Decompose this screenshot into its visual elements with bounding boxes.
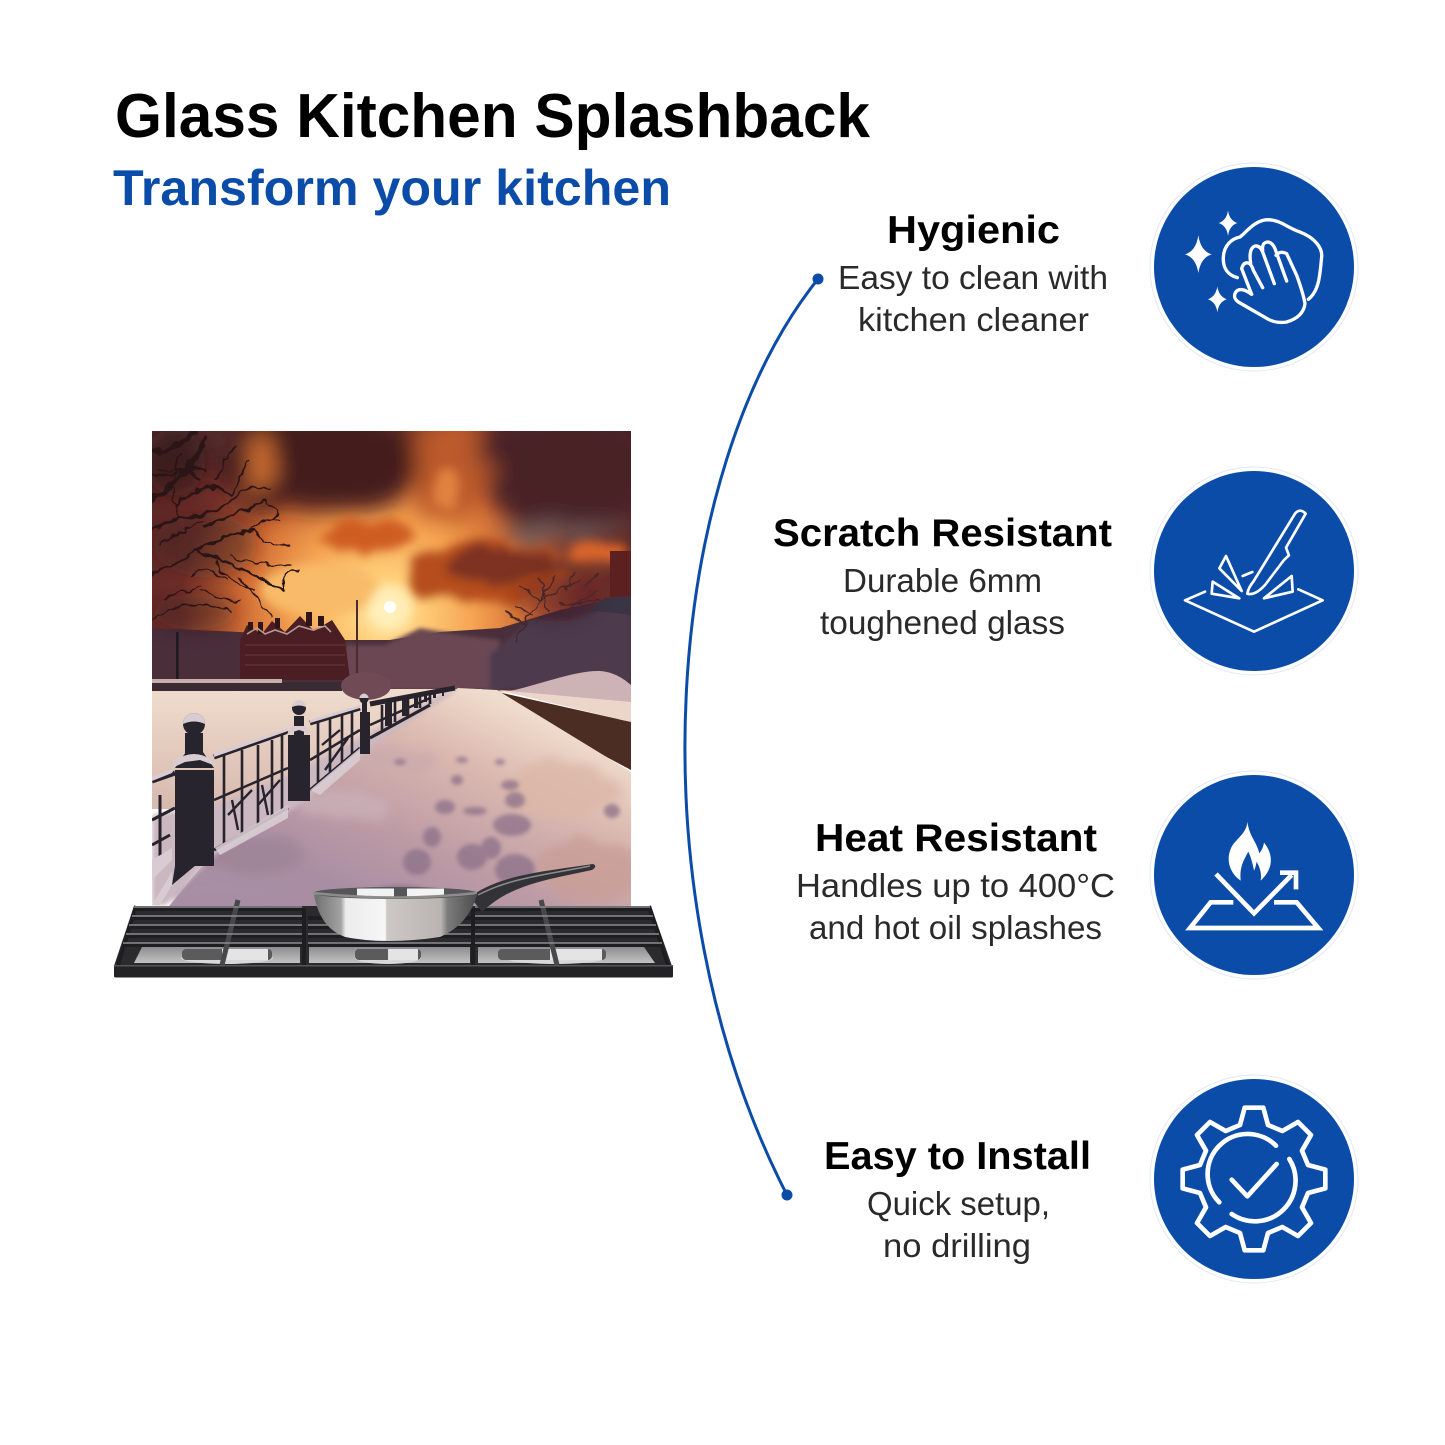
snowy path (165, 688, 631, 911)
fence post 1 (172, 689, 444, 885)
feature: easy to install: Quick setup, (867, 1185, 1050, 1222)
front edge (114, 965, 673, 978)
icon: scratch resistant knife on glass (1150, 467, 1358, 675)
snow shading (160, 748, 645, 905)
tree shade (145, 428, 595, 630)
title: Glass Kitchen Splashback (115, 82, 870, 151)
brick mansion block (240, 612, 350, 680)
gas cooktop (114, 864, 673, 978)
grates (118, 900, 668, 965)
burners (181, 949, 606, 964)
iron fence with posts (152, 688, 455, 905)
grate highlights (123, 907, 662, 943)
connector curve (685, 279, 818, 1195)
feature: scratch resistant: toughened glass (820, 604, 1065, 641)
left tree (150, 431, 300, 620)
icon: heat resistant flame (1150, 771, 1358, 979)
feature: heat resistant: and hot oil splashes (809, 909, 1102, 946)
feature: easy to install: Easy to Install (824, 1135, 1091, 1178)
feature: hygienic: Hygienic (887, 209, 1060, 252)
feature: easy to install: no drilling (883, 1227, 1031, 1264)
feature: scratch resistant: Scratch Resistant (773, 512, 1112, 555)
feature: hygienic: Easy to clean with (838, 259, 1108, 296)
lamp post (176, 632, 179, 679)
skyline and trees (152, 551, 631, 697)
hedge (152, 672, 391, 700)
splashback photo: snowy park at sunset (152, 431, 631, 906)
hob body (114, 906, 672, 966)
right tree (505, 572, 600, 640)
feature: heat resistant: Heat Resistant (815, 817, 1097, 860)
frying pan (313, 864, 595, 941)
steel plates (134, 947, 655, 963)
feature: scratch resistant: Durable 6mm (843, 562, 1042, 599)
snow drift under fence (152, 688, 460, 905)
subtitle: Transform your kitchen (113, 160, 671, 216)
icon: hygienic hand wiping (1150, 163, 1358, 371)
feature: heat resistant: Handles up to 400°C (796, 867, 1115, 904)
feature: hygienic: kitchen cleaner (858, 301, 1089, 338)
feature: heat resistant (796, 817, 1115, 946)
snow mound and brick wall (498, 671, 631, 770)
connector dot top (812, 274, 824, 284)
sky (152, 431, 631, 691)
feature: easy to install (824, 1135, 1091, 1264)
connector dot bottom (782, 1190, 792, 1200)
snowy lawn (152, 689, 482, 809)
feature: scratch resistant (773, 512, 1112, 641)
icon: easy install gear with check (1150, 1075, 1358, 1283)
snow caps (152, 694, 368, 905)
footprints (380, 755, 622, 887)
feature: hygienic (838, 209, 1108, 338)
